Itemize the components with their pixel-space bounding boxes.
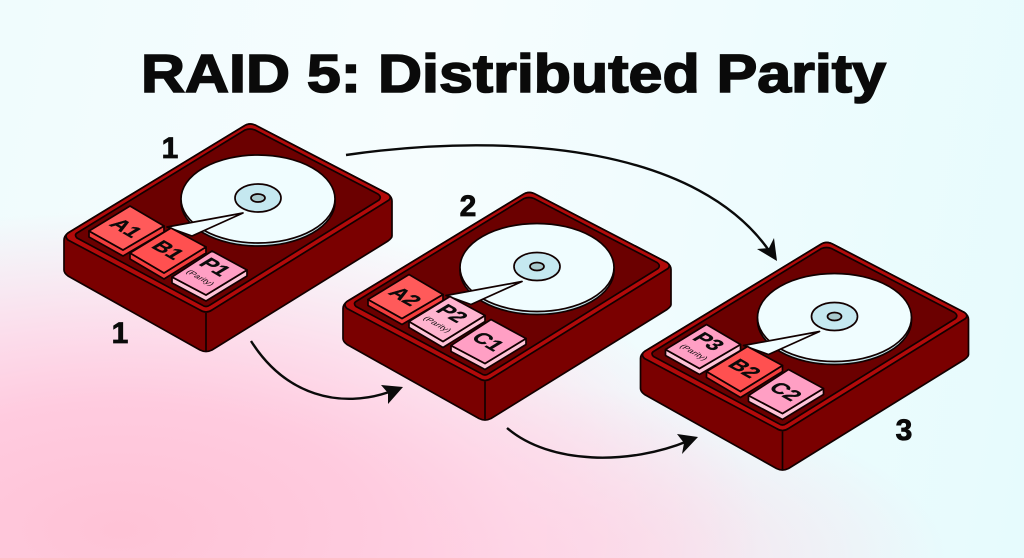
- block B1: B1: [146, 238, 189, 263]
- drive body: [343, 192, 671, 420]
- block C2: [748, 370, 824, 420]
- title: RAID 5: Distributed Parity: [141, 44, 886, 104]
- disc: [181, 155, 335, 246]
- drive body: [64, 124, 392, 352]
- block A1: [89, 206, 164, 256]
- drive 1: [64, 124, 392, 352]
- block P2: (Parity): [421, 315, 454, 334]
- block P1: P1: [193, 255, 236, 280]
- read head: [446, 282, 522, 304]
- block P2: P2: [430, 301, 473, 326]
- block B2: [706, 346, 782, 398]
- block P3: P3: [687, 329, 729, 354]
- arrow: drive 1 to drive 3: [346, 145, 777, 261]
- read head: [167, 213, 243, 236]
- block P1: [172, 251, 247, 301]
- block A2: [368, 274, 443, 324]
- block P3: [666, 324, 740, 374]
- block P1: (Parity): [184, 268, 217, 287]
- label: drive 1 top: 1: [162, 132, 178, 165]
- block A1: A1: [104, 216, 147, 241]
- disc: [758, 274, 912, 364]
- label: drive 2: 2: [460, 190, 476, 223]
- block P2: [409, 296, 485, 348]
- arrow: drive 1 to drive 2: [251, 341, 403, 404]
- block P3: (Parity): [677, 343, 711, 362]
- block A2: A2: [383, 284, 426, 309]
- block B2: B2: [722, 356, 766, 381]
- label: drive 3: 3: [896, 414, 912, 447]
- read head: [744, 332, 820, 354]
- drive 3: [640, 242, 968, 470]
- disc: [460, 224, 614, 314]
- label: drive 1 bottom: 1: [112, 317, 128, 350]
- block B1: [130, 228, 206, 279]
- drive 2: [343, 192, 671, 420]
- arrow: drive 2 to drive 3: [507, 428, 698, 458]
- block C1: [451, 320, 526, 370]
- block C2: C2: [763, 379, 807, 404]
- block C1: C1: [466, 329, 509, 354]
- drive body: [640, 242, 968, 470]
